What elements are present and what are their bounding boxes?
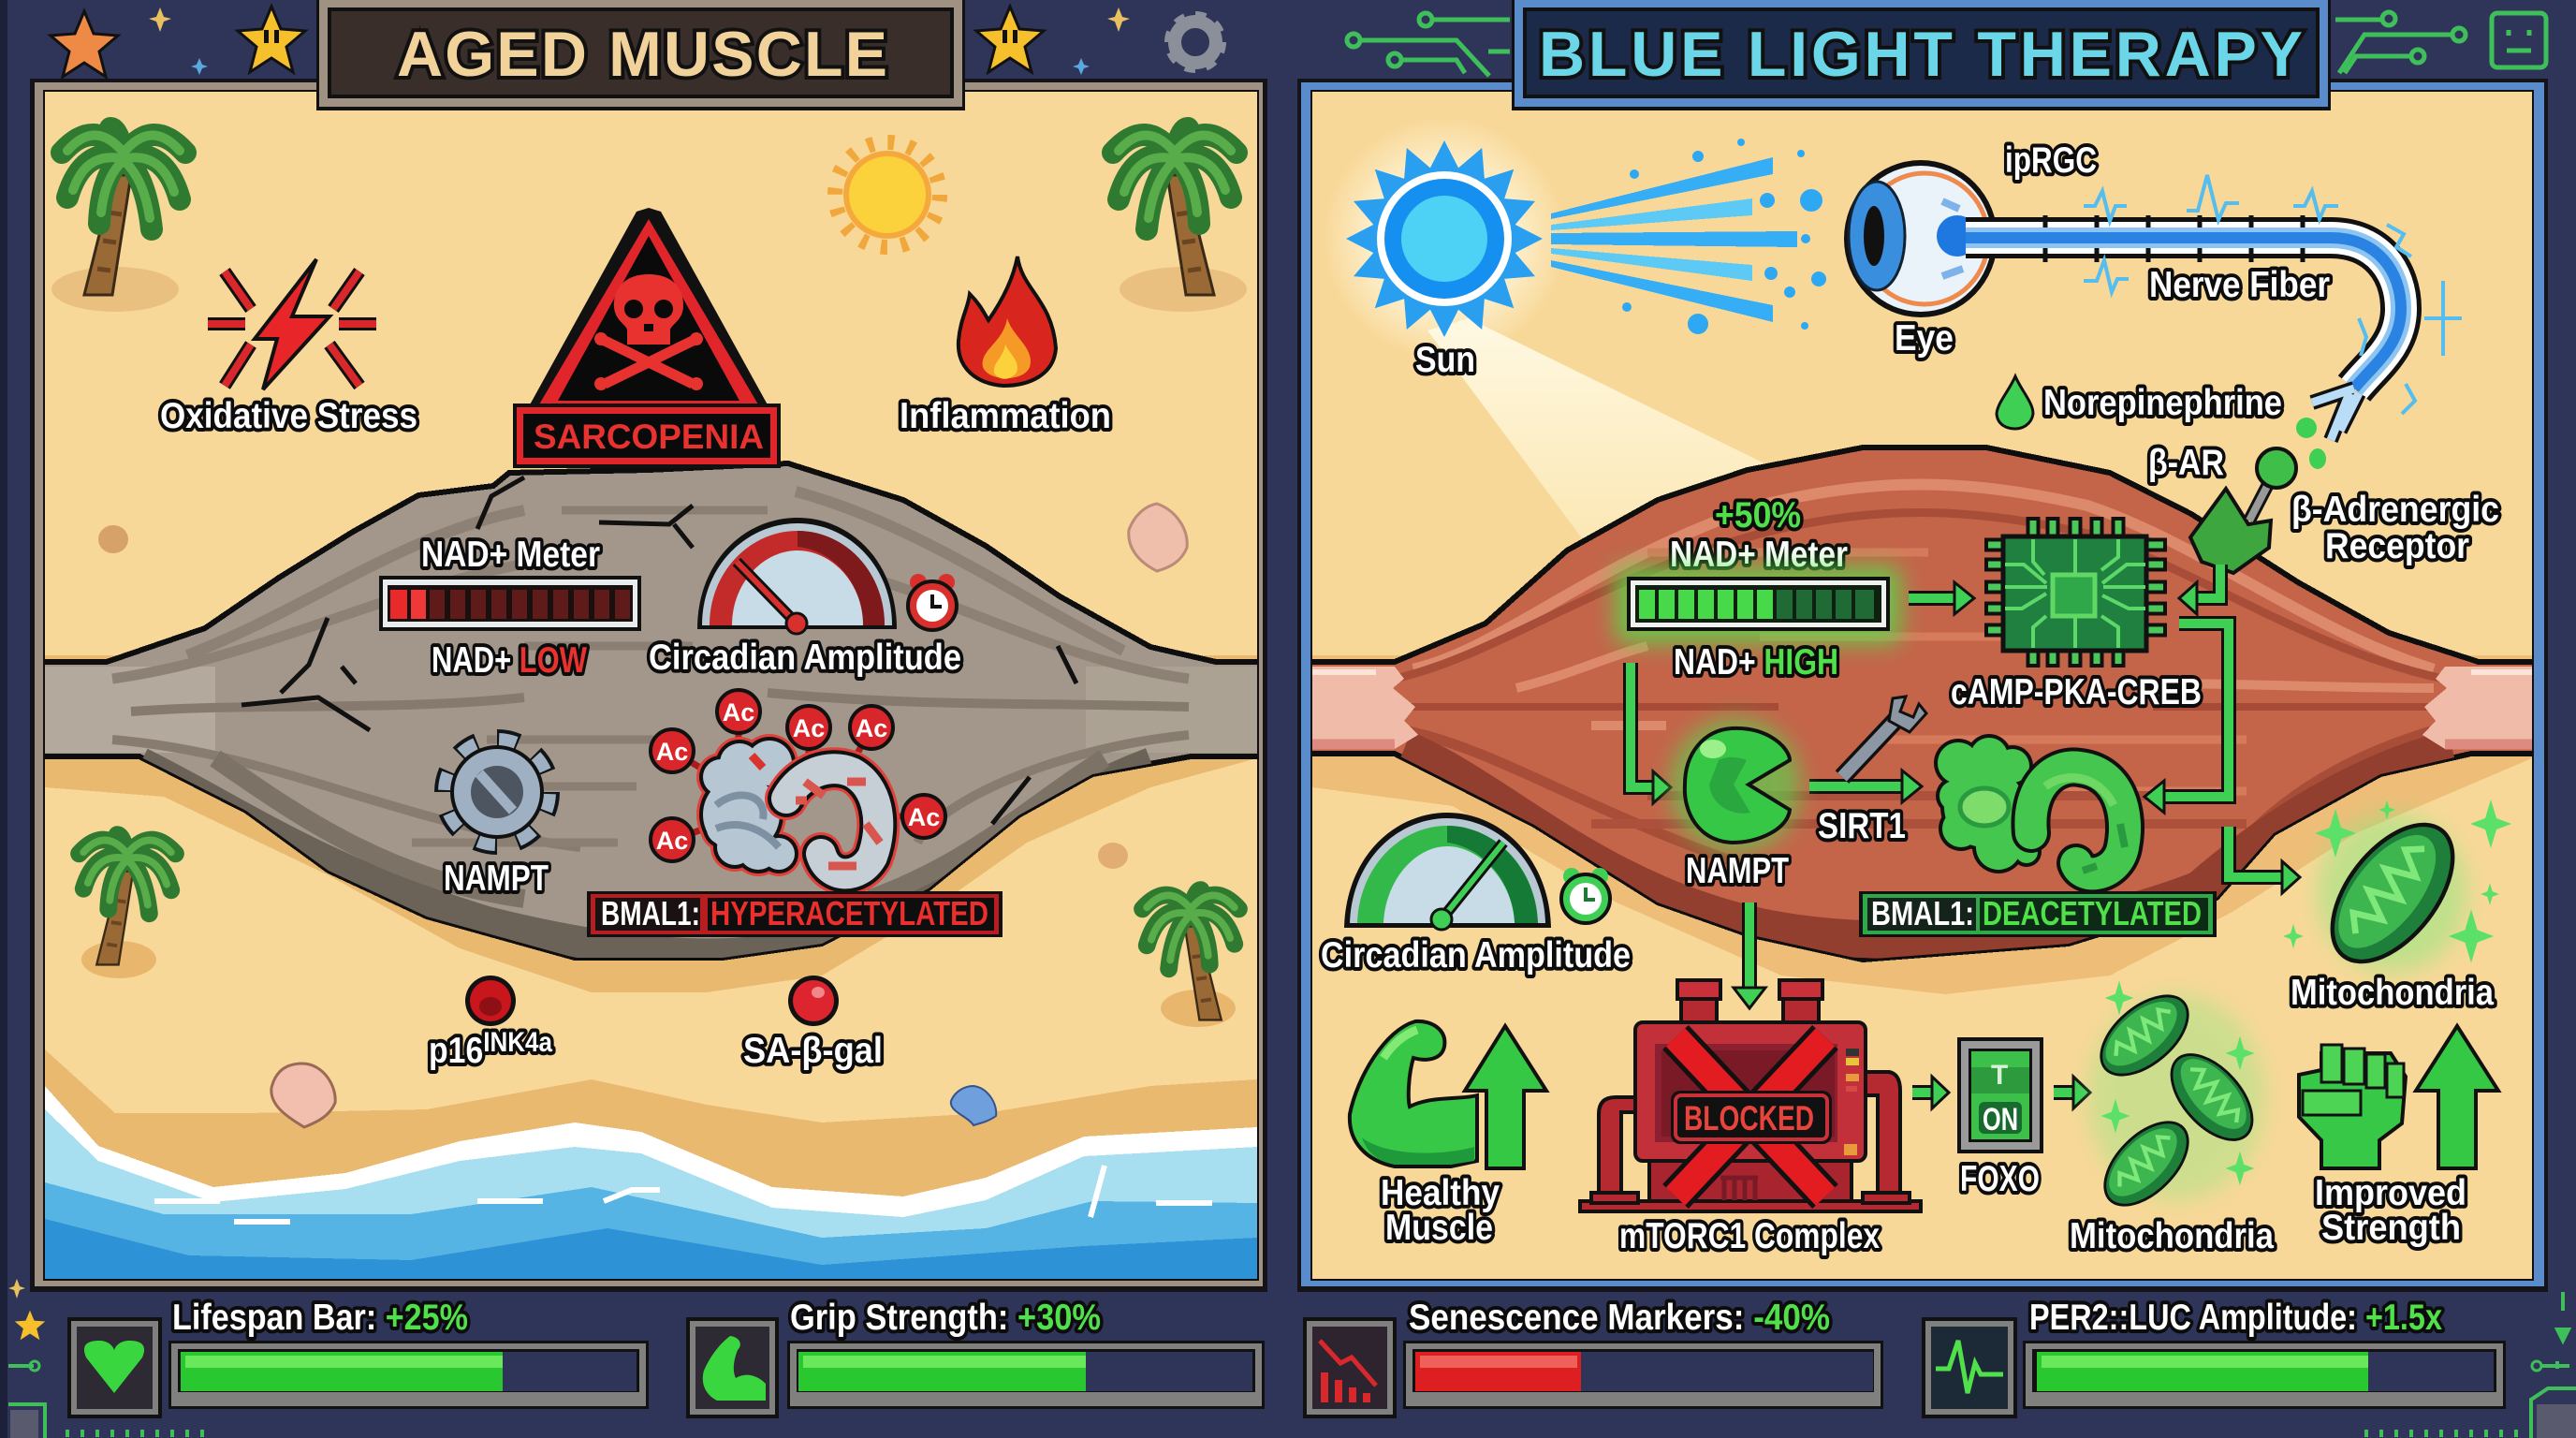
label: inflammation: Inflammation (900, 396, 1111, 436)
stat: senescence markers: Senescence Markers: -40% (1409, 1298, 1830, 1338)
label: camp-pka-creb: cAMP-PKA-CREB (1951, 672, 2202, 712)
green pathway arrows (1631, 565, 2300, 1108)
palm trees (51, 128, 1247, 1027)
label: improved strength: Strength (2321, 1208, 2461, 1248)
header: aged muscle: AGED MUSCLE (397, 19, 887, 90)
label box: bmal1 deacetylated: DEACETYLATED (1983, 894, 2202, 932)
icon: nampt gear (448, 743, 546, 841)
icon: mtorc1 complex blocked (1580, 980, 1921, 1211)
shells (98, 504, 1187, 1127)
label: nampt: NAMPT (1686, 851, 1789, 891)
label box: bmal1 deacetylated (1859, 891, 2217, 937)
icon: up arrow (2416, 1026, 2498, 1168)
label: norepinephrine: Norepinephrine (2043, 383, 2282, 423)
label: p16: p16 (429, 1031, 491, 1071)
icon: blue sun (1346, 140, 1543, 337)
header: blue light therapy (1512, 0, 2331, 110)
icon: eye (1844, 160, 2022, 317)
light beam (1427, 318, 1764, 546)
label: mtorc1 complex: mTORC1 Complex (1619, 1216, 1880, 1256)
icon: alarm clock (908, 574, 957, 630)
label: healthy muscle (1381, 1173, 1500, 1248)
warning sign: sarcopenia: SARCOPENIA (534, 418, 764, 456)
label: beta-adrenergic receptor: β-Adrenergic (2291, 490, 2499, 530)
label box: bmal1 hyperacetylated (587, 891, 1003, 937)
icon: mtorc1 complex blocked: BLOCKED (1684, 1099, 1814, 1137)
label: circadian amplitude: Circadian Amplitude (1321, 935, 1631, 976)
stat: per2 luc amplitude (1922, 1298, 2506, 1418)
label: nampt: NAMPT (444, 858, 549, 899)
protein: bmal1 hyperacetylated (651, 690, 945, 876)
label: healthy muscle: Healthy (1381, 1173, 1500, 1213)
meter: nad low (379, 576, 641, 631)
header decor right: circuits (1347, 12, 2546, 76)
header decor left (51, 7, 1220, 77)
label: nad low: NAD+ LOW (432, 640, 587, 681)
icon: up arrow (1465, 1026, 1546, 1168)
gauge: circadian amplitude high (1344, 813, 1551, 930)
label: improved strength (2315, 1173, 2466, 1248)
icon: wrench (1842, 697, 1926, 777)
icon: oxidative stress lightning (208, 259, 376, 389)
label: nerve fiber: Nerve Fiber (2149, 265, 2330, 305)
nerve signals (2084, 175, 2462, 414)
label: healthy muscle: Muscle (1385, 1208, 1493, 1248)
icon: sun (835, 142, 940, 247)
icon: fist (2299, 1045, 2406, 1168)
icon: healthy muscle flex (1350, 1021, 1477, 1167)
beach and ocean (45, 655, 1257, 1283)
icon: green alarm clock (1561, 868, 1610, 923)
label: mitochondria: Mitochondria (2070, 1216, 2274, 1256)
protein: bmal1 hyperacetylated: Ac (723, 698, 754, 726)
icon: sa-beta-gal marker (788, 976, 839, 1026)
rays (1551, 139, 1826, 334)
label: p16: INK4a (483, 1027, 552, 1058)
stat: lifespan bar: Lifespan Bar: +25% (172, 1298, 468, 1338)
corner decor right (2364, 1292, 2576, 1438)
label: iprgc: ipRGC (2005, 140, 2097, 181)
icons: mitochondria cluster (2087, 981, 2267, 1220)
label: sa-beta-gal: SA-β-gal (743, 1031, 883, 1071)
protein: bmal1 hyperacetylated: Ac (793, 714, 825, 742)
label box: bmal1 hyperacetylated: HYPERACETYLATED (710, 894, 988, 932)
label: oxidative stress: Oxidative Stress (160, 396, 417, 436)
label: sirt1: SIRT1 (1818, 806, 1906, 846)
label: plus 50 percent: +50% (1715, 495, 1801, 536)
panel: aged muscle (28, 79, 1273, 1292)
icon: nampt green (1670, 718, 1801, 853)
warning sign: sarcopenia (513, 208, 781, 468)
icon: foxo switch: T (1991, 1060, 2008, 1091)
label: foxo: FOXO (1960, 1159, 2040, 1199)
gauge: circadian amplitude low (697, 518, 897, 634)
header: aged muscle (316, 0, 965, 110)
panel: blue light therapy (1296, 79, 2548, 1292)
icon: camp chip (1984, 517, 2167, 668)
label box: bmal1 deacetylated: BMAL1: (1871, 894, 1974, 932)
stat: per2 luc amplitude: PER2::LUC Amplitude: +1.5x (2029, 1298, 2442, 1338)
icon: foxo switch (1957, 1037, 2043, 1153)
label: beta-ar: β-AR (2148, 443, 2224, 483)
label: nad meter: NAD+ Meter (421, 535, 600, 575)
protein: bmal1 hyperacetylated: Ac (856, 714, 887, 742)
protein: bmal1 deacetylated (1934, 734, 2125, 873)
corner decor left (8, 1279, 213, 1438)
stat: grip strength: Grip Strength: +30% (790, 1298, 1101, 1338)
label: eye: Eye (1895, 318, 1954, 359)
label: sun: Sun (1415, 340, 1475, 380)
icon: foxo switch: ON (1983, 1102, 2018, 1137)
protein: bmal1 hyperacetylated: Ac (656, 827, 688, 855)
label: circadian amplitude: Circadian Amplitude (649, 638, 961, 678)
label: mitochondria: Mitochondria (2291, 973, 2494, 1013)
icon: p16 marker (465, 976, 516, 1026)
header: blue light therapy: BLUE LIGHT THERAPY (1539, 19, 2303, 90)
protein: bmal1 hyperacetylated: Ac (656, 738, 688, 766)
icon: mitochondria large (2283, 800, 2511, 983)
label: improved strength: Improved (2315, 1173, 2466, 1213)
stat: lifespan bar (67, 1298, 649, 1418)
icon: robot face (2492, 13, 2546, 67)
muscle: healthy (1296, 448, 2546, 994)
icon: inflammation flame (959, 257, 1056, 386)
nerve fiber (1966, 215, 2401, 440)
label: beta-adrenergic receptor (2291, 490, 2499, 566)
label box: bmal1 hyperacetylated: BMAL1: (601, 894, 700, 932)
label: nad high: NAD+ HIGH (1674, 642, 1838, 682)
meter: nad high (1615, 565, 1901, 644)
stat: senescence markers (1303, 1298, 1883, 1418)
label: beta-adrenergic receptor: Receptor (2325, 526, 2469, 566)
muscle: aged (28, 463, 1273, 958)
stat: grip strength (686, 1298, 1265, 1418)
outer dark edge (0, 0, 7, 1438)
protein: bmal1 hyperacetylated: Ac (908, 803, 940, 831)
icon: receptor lever (2190, 418, 2326, 573)
icon: skull and crossbones (594, 274, 703, 390)
icon: norepinephrine drop (1997, 376, 2033, 429)
label: nad meter high: NAD+ Meter (1670, 535, 1848, 575)
